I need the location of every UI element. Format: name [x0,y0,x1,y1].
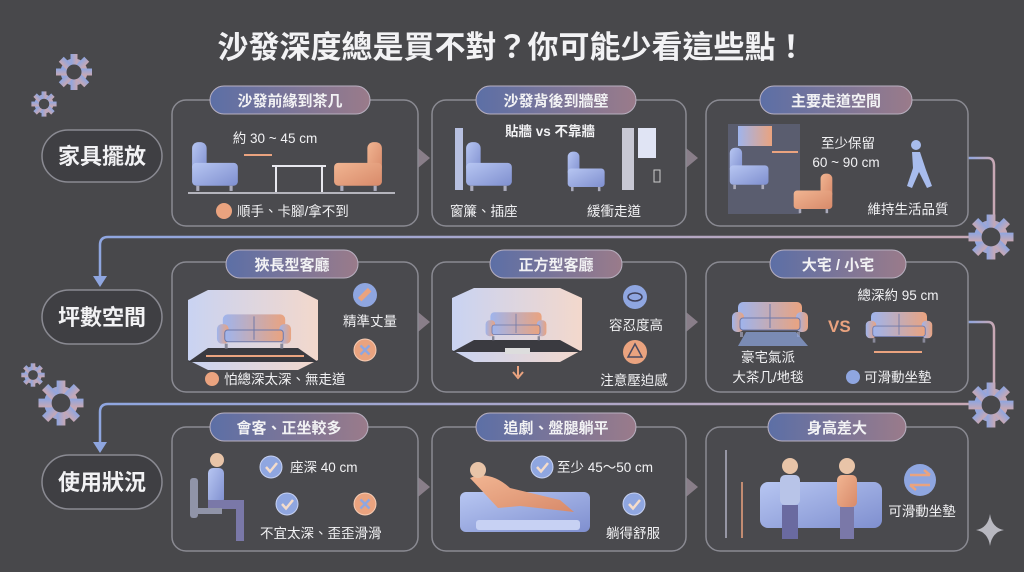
panel: 追劇、盤腿躺平: 至少 45～50 cm [557,460,653,475]
panel: 狹長型客廳: 精準丈量 [343,314,397,329]
panel: 正方型客廳 [432,250,686,392]
panel: 沙發背後到牆壁: 窗簾、插座 [450,204,518,219]
panel: 大宅 / 小宅: VS [828,317,851,336]
panel: 主要走道空間: 主要走道空間 [791,92,881,110]
panel: 身高差大: 身高差大 [807,419,867,437]
row label: 家具擺放 [42,130,162,182]
panel: 大宅 / 小宅 [706,250,968,392]
panel: 狹長型客廳: 怕總深太深、無走道 [224,372,346,387]
panel: 追劇、盤腿躺平: 追劇、盤腿躺平 [503,419,609,437]
panel: 大宅 / 小宅: 總深約 95 cm [857,288,939,303]
flow arrows between panels [418,148,698,497]
panel: 主要走道空間 [706,86,968,226]
panel: 會客、正坐較多 [172,413,418,551]
row label: 使用狀況 [42,455,162,509]
panel: 沙發背後到牆壁: 緩衝走道 [587,204,641,219]
panel: 身高差大 [706,413,968,551]
row label: 坪數空間 [42,290,162,344]
panel: 主要走道空間: 60 ~ 90 cm [812,155,880,170]
row label: 家具擺放: 家具擺放 [58,144,146,169]
panel: 沙發前緣到茶几: 約 30 ~ 45 cm [233,131,317,146]
icon: gears right [21,214,1014,428]
panel: 沙發前緣到茶几: 沙發前緣到茶几 [237,92,343,110]
panel: 會客、正坐較多: 不宜太深、歪歪滑滑 [260,526,382,541]
panel: 追劇、盤腿躺平: 躺得舒服 [606,525,660,541]
panel: 追劇、盤腿躺平 [432,413,686,551]
title: 沙發深度總是買不對？你可能少看這些點！ [218,30,806,65]
panel: 沙發背後到牆壁 [432,86,686,226]
icon: gears top-left [31,54,92,117]
panel: 會客、正坐較多: 座深 40 cm [290,460,358,475]
arrows down [93,276,107,453]
panel: 大宅 / 小宅: 大宅 / 小宅 [802,256,874,274]
panel: 沙發背後到牆壁: 貼牆 vs 不靠牆 [505,123,596,139]
row label: 使用狀況: 使用狀況 [58,470,146,495]
panel: 主要走道空間: 維持生活品質 [868,202,948,217]
panel: 會客、正坐較多: 會客、正坐較多 [236,419,342,437]
panel: 狹長型客廳: 狹長型客廳 [254,256,330,274]
panel: 大宅 / 小宅: 大茶几/地毯 [732,370,804,385]
icon: sparkle [976,514,1004,546]
panel: 正方型客廳: 容忍度高 [609,317,663,333]
connectors [100,158,994,446]
panel: 大宅 / 小宅: 豪宅氣派 [741,350,795,365]
panel: 身高差大: 可滑動坐墊 [888,504,956,519]
row label: 坪數空間: 坪數空間 [58,305,146,330]
panel: 正方型客廳: 正方型客廳 [518,256,594,274]
panel: 正方型客廳: 注意壓迫感 [600,372,668,388]
panel: 狹長型客廳 [172,250,418,392]
panel: 沙發前緣到茶几 [172,86,418,226]
panel: 主要走道空間: 至少保留 [821,136,875,151]
panel: 沙發前緣到茶几: 順手、卡腳/拿不到 [237,203,349,219]
panel: 沙發背後到牆壁: 沙發背後到牆壁 [503,92,609,110]
panel: 大宅 / 小宅: 可滑動坐墊 [864,370,932,385]
